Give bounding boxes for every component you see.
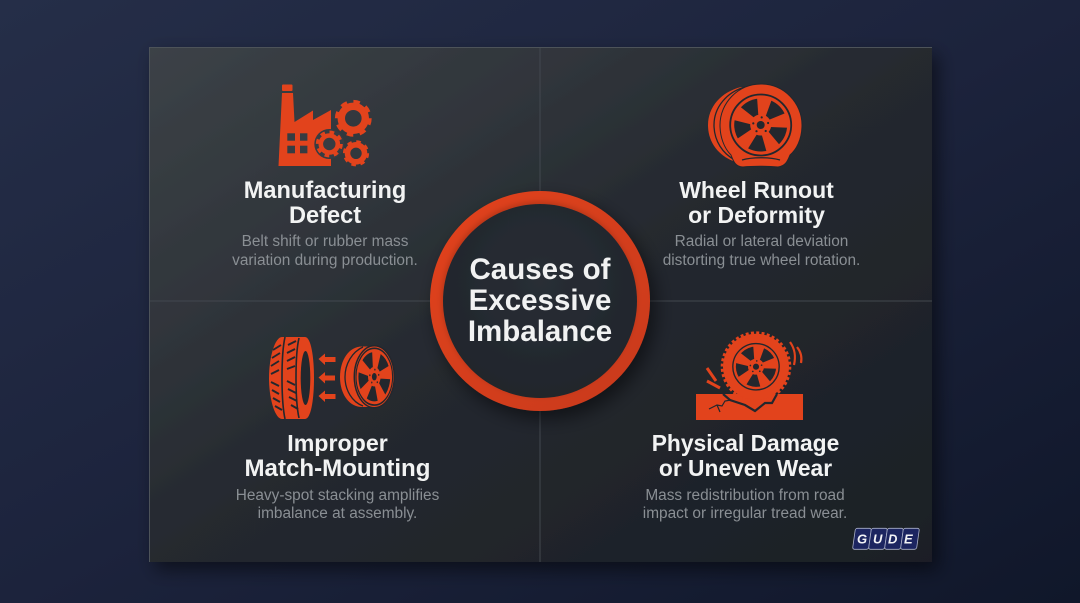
logo: GUDE: D bbox=[888, 532, 898, 546]
heading: wheel runout: or Deformity bbox=[688, 202, 825, 228]
text: physical damage description: impact or irregular tread wear. bbox=[643, 505, 847, 522]
text: match-mounting description: Heavy-spot stacking amplifies bbox=[236, 487, 440, 504]
panel: wheel runout bbox=[663, 84, 860, 269]
heading: manufacturing defect: Defect bbox=[289, 203, 361, 229]
logo: GUDE: E bbox=[904, 532, 913, 546]
text: manufacturing description: Belt shift or rubber mass bbox=[242, 233, 409, 250]
heading: causes of excessive imbalance: Causes of bbox=[470, 253, 611, 286]
heading: causes of excessive imbalance: Imbalance bbox=[468, 315, 612, 348]
heading: causes of excessive imbalance: Excessive bbox=[469, 284, 611, 317]
heading: wheel runout: Wheel Runout bbox=[679, 177, 834, 203]
icon: deformed wheel bbox=[708, 84, 802, 167]
heading: manufacturing defect: Manufacturing bbox=[244, 178, 406, 204]
icon: tire and wheel with arrows bbox=[269, 337, 394, 419]
heading: match-mounting: Match-Mounting bbox=[244, 455, 431, 482]
panel: card bbox=[149, 47, 932, 562]
logo: GUDE bbox=[852, 528, 919, 549]
text: wheel runout description: distorting true wheel rotation. bbox=[663, 252, 860, 269]
panel: physical damage bbox=[643, 333, 847, 522]
heading: match-mounting: Improper bbox=[287, 430, 388, 456]
icon: damaged wheel on cracked road bbox=[696, 333, 803, 420]
text: match-mounting description: imbalance at assembly. bbox=[258, 505, 417, 522]
heading: physical damage: or Uneven Wear bbox=[659, 455, 832, 481]
icon: factory with gears bbox=[278, 84, 370, 166]
logo: GUDE: U bbox=[873, 532, 883, 546]
logo: GUDE: G bbox=[857, 532, 867, 546]
text: manufacturing description: variation during production. bbox=[232, 252, 418, 269]
text: wheel runout description: Radial or lateral deviation bbox=[675, 233, 848, 250]
panel: match-mounting bbox=[236, 337, 440, 522]
panel: manufacturing defect bbox=[232, 84, 418, 269]
heading: physical damage: Physical Damage bbox=[652, 430, 839, 456]
central badge bbox=[430, 191, 650, 411]
text: physical damage description: Mass redistribution from road bbox=[645, 487, 845, 504]
